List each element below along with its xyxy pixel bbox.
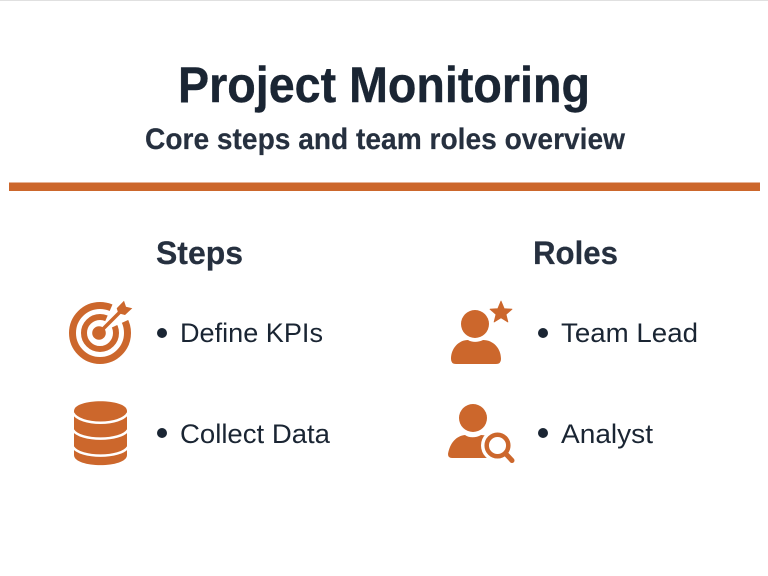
subtitle: Core steps and team roles overview — [145, 123, 626, 156]
icon: database — [73, 401, 128, 465]
title: Project Monitoring — [178, 57, 590, 113]
icon: target with arrow — [72, 292, 141, 360]
icon: person with star — [451, 301, 512, 364]
panel: roles — [448, 235, 698, 462]
panel: steps — [72, 235, 331, 465]
item: collect data: Collect Data — [180, 419, 331, 449]
heading: steps: Steps — [156, 235, 243, 271]
item: team lead: Team Lead — [561, 318, 698, 348]
item: analyst: Analyst — [561, 419, 654, 449]
item: define KPIs: Define KPIs — [180, 318, 323, 348]
icon: person with magnifier — [448, 404, 514, 462]
heading: roles: Roles — [533, 235, 618, 271]
orange divider bar — [9, 182, 760, 191]
